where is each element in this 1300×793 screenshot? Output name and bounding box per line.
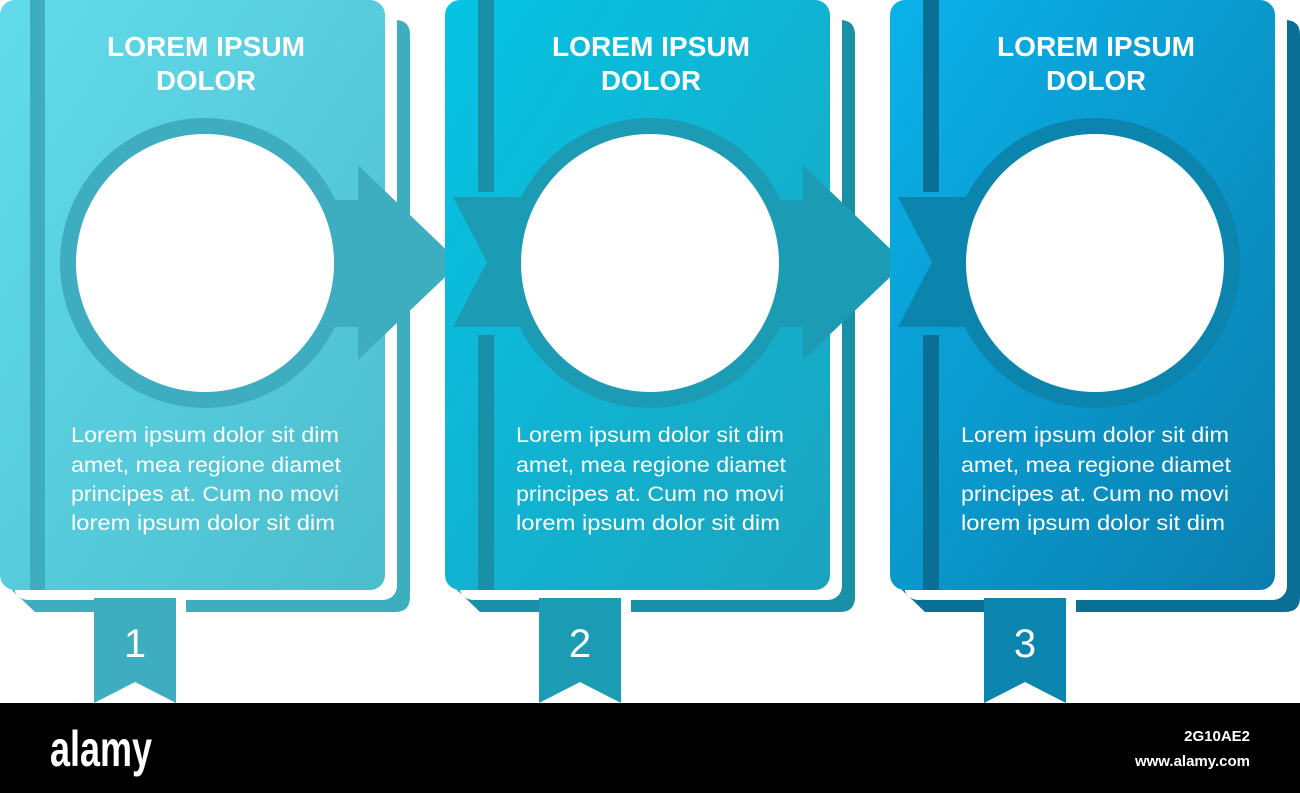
footer bar: 2G10AE2 — [1184, 728, 1250, 745]
bookmark 1: 1 — [124, 622, 146, 666]
book 3 — [890, 0, 1300, 703]
title 3: DOLOR — [1046, 65, 1146, 96]
arrow tail 3 — [898, 197, 1005, 327]
title 2: LOREM IPSUM — [552, 31, 750, 62]
bookmark 2 — [539, 598, 621, 703]
body text 2: lorem ipsum dolor sit dim — [516, 512, 780, 535]
arrow 1 — [320, 165, 460, 360]
book 2 — [445, 0, 905, 703]
body text 3: principes at. Cum no movi — [961, 483, 1229, 506]
title 2: DOLOR — [601, 65, 701, 96]
title 3 — [997, 31, 1195, 96]
bookmark 2: 2 — [569, 622, 591, 666]
circle 2 — [505, 118, 795, 408]
title 1 — [107, 31, 305, 96]
body text 1: principes at. Cum no movi — [71, 483, 339, 506]
body text 1: amet, mea regione diamet — [71, 454, 341, 477]
body text 2: Lorem ipsum dolor sit dim — [516, 424, 784, 447]
title 2 — [552, 31, 750, 96]
arrow tail 2 — [453, 197, 560, 327]
body text 2: principes at. Cum no movi — [516, 483, 784, 506]
back cover 1 — [12, 20, 410, 612]
title 1: LOREM IPSUM — [107, 31, 305, 62]
title 3: LOREM IPSUM — [997, 31, 1195, 62]
footer bar: www.alamy.com — [1134, 753, 1250, 770]
body text 3 — [961, 424, 1231, 535]
body text 1: Lorem ipsum dolor sit dim — [71, 424, 339, 447]
arrow 2 — [765, 165, 905, 360]
body text 3: lorem ipsum dolor sit dim — [961, 512, 1225, 535]
footer bar: alamy — [50, 721, 152, 777]
title 1: DOLOR — [156, 65, 256, 96]
bookmark 1 — [94, 598, 176, 703]
bookmark 3 — [984, 598, 1066, 703]
body text 2 — [516, 424, 786, 535]
footer bar — [0, 703, 1300, 793]
body text 3: Lorem ipsum dolor sit dim — [961, 424, 1229, 447]
body text 1 — [71, 424, 341, 535]
bookmark 3: 3 — [1014, 622, 1036, 666]
body text 3: amet, mea regione diamet — [961, 454, 1231, 477]
circle 3 — [950, 118, 1240, 408]
body text 1: lorem ipsum dolor sit dim — [71, 512, 335, 535]
circle 1 — [60, 118, 350, 408]
body text 2: amet, mea regione diamet — [516, 454, 786, 477]
book 1 — [0, 0, 460, 703]
